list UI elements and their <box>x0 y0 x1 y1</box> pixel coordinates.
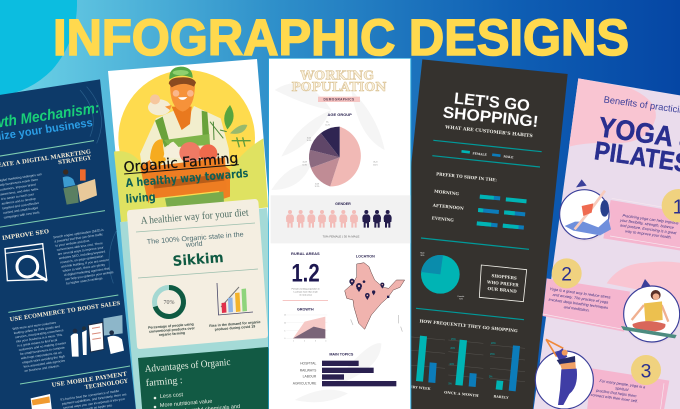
area chart: growth: 1 <box>293 341 294 343</box>
bar chart: frequency: 20% <box>450 348 455 350</box>
bar chart: frequency: 15% <box>451 339 456 341</box>
bar chart: frequency: EVERY WEEK <box>405 384 431 391</box>
body text: ecommerce: services, incorporating ecommerce <box>15 328 64 339</box>
captions: organic farming <box>159 331 185 337</box>
section: mobile payment: TECHNOLOGY <box>85 379 129 391</box>
panel: working population <box>268 58 411 409</box>
step 2: and meditation. <box>563 305 590 313</box>
bar chart icon <box>217 283 253 315</box>
captions: Percentage of people using <box>148 322 194 330</box>
area chart: growth: 4 <box>325 341 326 343</box>
step 1: and posture. Exercising is a great <box>620 223 678 235</box>
heading: yoga and pilates <box>592 111 680 178</box>
donut chart: 70% <box>164 300 174 306</box>
step 2 <box>543 258 680 344</box>
bar chart: frequency: 20% <box>491 343 496 345</box>
body text: seo: are several ways to improve your <box>57 245 104 256</box>
donut chart <box>154 288 184 316</box>
step 3: practice that helps them <box>595 389 637 398</box>
organic state text: world <box>185 241 203 249</box>
step 2: Yoga is a great way to reduce stress <box>549 287 611 300</box>
pie chart: age group: AGE GROUP <box>327 112 352 117</box>
bar chart: main topics: AGRICULTURE <box>293 382 317 386</box>
area chart: growth: 0 <box>284 338 285 340</box>
callout: shoppers: OUR BRAND <box>487 286 517 294</box>
subheading: healthy way: A healthy way towards <box>125 166 249 190</box>
callout: shoppers: WHO PREFER <box>486 279 519 288</box>
body text: digital marketing: awareness, and drive sales. <box>0 187 39 197</box>
hills <box>114 138 268 222</box>
subheading: healthy way <box>125 166 249 206</box>
bar chart: main topics: LABOUR <box>303 375 317 379</box>
section: mobile payment: USE MOBILE PAYMENT <box>51 372 128 389</box>
shop time labels: MORNING <box>434 189 460 196</box>
body text: digital marketing: campaigns with new tools. <box>3 210 41 220</box>
area chart: growth: 15 <box>284 315 286 317</box>
area chart: growth: 10 <box>284 322 286 324</box>
shop time labels <box>432 171 498 223</box>
pie chart: age group: 25-39 <box>315 183 319 185</box>
body text: seo: a powerful tool that can drive traffic <box>54 232 104 244</box>
panel: organic farming <box>108 59 290 409</box>
step 3: For many people, yoga is a <box>599 379 645 389</box>
area chart: growth: GROWTH <box>297 307 314 311</box>
bar chart: frequency: 15% <box>490 354 495 356</box>
body text: seo: can help you optimize your website <box>65 270 114 281</box>
stat: rural areas: Female working population in <box>292 287 320 290</box>
organic state text: The 100% Organic state in the <box>147 231 244 246</box>
panel: growth mechanism <box>0 79 137 409</box>
bar chart: frequency: 10% <box>449 364 454 366</box>
body text: ecommerce: customers and so making it easier <box>18 341 66 352</box>
step 2: 2 <box>561 265 572 286</box>
step 1: way to improve your health. <box>625 229 672 240</box>
pictogram: gender: GENDER <box>335 202 351 206</box>
panel: let's go shopping <box>385 59 568 409</box>
icon: person at desk <box>63 169 97 205</box>
bar chart: main topics: MAIN TOPICS <box>329 352 354 356</box>
stat: rural areas: Lucknow more than male <box>294 290 319 293</box>
body text: seo: of digital marketing agencies that <box>64 266 110 277</box>
heading: let's go shopping: SHOPPING! <box>442 104 539 131</box>
body text: digital marketing: It is easier to reach your <box>1 192 35 201</box>
heading: let's go shopping: LET'S GO <box>453 90 531 115</box>
body text: digital marketing: audience and to develop <box>1 197 36 206</box>
subheading: healthy way: living <box>125 190 156 206</box>
area chart: growth: 3 <box>315 341 316 343</box>
body text: ecommerce: With more and more customers <box>12 320 57 331</box>
tag: demographics: DEMOGRAPHICS <box>324 98 354 102</box>
bar chart: main topics <box>293 352 396 386</box>
captions: Rise in the demand for organic <box>209 320 261 328</box>
box: advantages: Less cost <box>160 392 184 400</box>
step 2: and anxiety. The practice of yoga <box>552 293 609 305</box>
body text: ecommerce: fees associated with agencies <box>23 359 66 369</box>
box: advantages: farming : <box>145 375 183 389</box>
body text: ecommerce: with huge corporations via an <box>21 350 62 360</box>
icon: team with phone <box>71 315 124 357</box>
body text: ecommerce: looking online for their goods and <box>14 324 60 335</box>
pie chart: age group: 40-49 <box>303 162 307 164</box>
area chart: growth <box>284 307 327 343</box>
body text: seo: websites SEO, including keyword <box>59 249 106 260</box>
pie chart: Male <box>420 252 426 254</box>
body text: ecommerce: on business and mission. <box>24 364 60 373</box>
body text: digital marketing: content and small budget <box>3 206 38 215</box>
heading: working population: WORKING <box>299 67 374 82</box>
tag: demographics <box>318 97 360 102</box>
pie chart: age group: 12.2% <box>325 124 331 126</box>
box: advantages: Advantages of Organic <box>144 357 231 375</box>
pie chart: age group: 10.3% <box>302 164 308 166</box>
stat: rural areas: RURAL AREAS <box>291 251 320 256</box>
area chart: growth: 2 <box>304 341 305 343</box>
body text: mobile payment: payment capabilities, and fortunately, there are <box>62 392 127 406</box>
bar chart: frequency: 5% <box>448 383 452 385</box>
body text: ecommerce: is a great means to find local <box>17 338 58 348</box>
section: digital marketing: STRATEGY <box>58 155 93 166</box>
step 3: spiritual <box>615 386 629 392</box>
body text: seo: to your website and thus <box>55 239 90 248</box>
area chart: growth: 5 <box>284 330 285 332</box>
bar chart: frequency: 5% <box>489 376 492 378</box>
body text: seo: where to start, there are plenty <box>62 263 106 273</box>
bar chart: frequency <box>405 336 525 400</box>
legend: FEMALE <box>472 151 488 157</box>
stat: rural areas: in rural areas <box>299 293 312 296</box>
legend: MALE <box>503 154 514 159</box>
card heading: A healthier way for your diet <box>140 208 249 227</box>
body text: ecommerce: elegant store avoiding the high <box>22 354 65 365</box>
heading: organic farming: Organic Farming <box>123 151 239 176</box>
illustration: vegetable crate <box>140 139 230 207</box>
captions: produce during covid 19 <box>214 324 255 332</box>
bar chart: frequency: ONCE A MONTH <box>444 390 479 398</box>
callout: shoppers: SHOPPERS <box>491 273 517 281</box>
captions: conventional products over <box>149 326 196 334</box>
pie chart: age group: 55.4% <box>373 164 378 166</box>
step 3 <box>535 339 669 409</box>
pie chart: 30% <box>420 255 425 257</box>
icon: phone <box>31 394 53 409</box>
shop time labels: AFTERNOON <box>432 203 464 211</box>
body text: mobile payment: It's hard to beat the convenience of mobile <box>60 389 120 402</box>
pie chart: age group: 65+ <box>326 122 329 124</box>
heading: working population: POPULATION <box>291 79 387 94</box>
shop time labels: EVENING <box>432 215 454 223</box>
step 1: Practicing yoga can help improve <box>622 214 679 226</box>
step 3: connect with their inner self. <box>591 393 638 404</box>
heading: let's go shopping <box>442 90 539 131</box>
circle: yellow sun <box>118 70 255 207</box>
title: INFOGRAPHIC DESIGNS <box>53 9 629 66</box>
pie chart <box>420 252 465 301</box>
body text: ecommerce: into your business is a must. This <box>16 333 63 344</box>
step 1 <box>560 179 680 251</box>
icon: search window <box>5 244 47 281</box>
step 1: your flexibility, strength, balance <box>619 218 674 230</box>
stat: rural areas: 1.2 <box>291 260 320 288</box>
captions <box>148 320 261 337</box>
sikkim: Sikkim <box>172 250 224 270</box>
stat: rural areas <box>283 251 328 301</box>
pictogram: gender <box>286 202 392 239</box>
shop time labels: PREFER TO SHOP IN THE: <box>436 171 498 183</box>
body text: seo: Search engine optimization (SEO) is <box>53 228 104 239</box>
box: advantages <box>138 347 290 409</box>
bar chart: frequency: RARELY <box>493 394 509 400</box>
pictogram: gender: 70% FEMALE | 30 % MALE <box>323 235 359 239</box>
callout: shoppers <box>479 265 527 302</box>
heading: frequency: HOW FREQUENTLY THEY GO SHOPPING <box>419 318 518 333</box>
illustration: farmer <box>140 67 251 165</box>
pie chart: age group: 18-24 <box>373 161 378 163</box>
legend <box>461 150 514 159</box>
map: india: LOCATION <box>356 254 375 258</box>
subheading: customer habits: WHAT ARE CUSTOMER'S HABITS <box>444 124 533 139</box>
bar chart: main topics: RAILWAYS <box>300 368 317 372</box>
body text: ecommerce: for small businesses to compete <box>20 346 65 356</box>
card: healthier diet <box>127 199 268 349</box>
stacked bars <box>477 195 527 230</box>
pie chart: age group: 12.2% <box>315 186 320 188</box>
panel: yoga and pilates <box>533 78 680 409</box>
pie chart: age group: 50-64 <box>307 137 311 139</box>
section: ecommerce: USE ECOMMERCE TO BOOST SALES <box>9 301 121 323</box>
pie chart: age group <box>302 112 378 188</box>
step 3: 3 <box>641 361 651 382</box>
pie chart: 70% <box>459 299 463 301</box>
body text: seo: for higher search rankings. <box>66 276 104 286</box>
pie chart: Female <box>458 296 465 298</box>
body text: digital marketing: targeted and cost-effective <box>2 201 40 210</box>
body text: seo: and link building. If you are unsure <box>61 258 109 269</box>
bar chart: main topics: HOSPITAL <box>300 361 316 365</box>
section: improve seo: IMPROVE SEO <box>2 229 50 242</box>
step 2: involves deep breathing techniques <box>548 298 608 310</box>
map: india <box>345 254 405 332</box>
box: advantages: More nutritional value <box>160 399 213 409</box>
body text: seo: research, on-page optimization <box>60 254 104 265</box>
body text: digital marketing: customers, improve brand <box>0 183 36 192</box>
body text: seo: conversions with less cost. There <box>56 241 103 252</box>
pie chart: age group: 10.3% <box>307 140 312 142</box>
heading: working population <box>291 67 387 94</box>
